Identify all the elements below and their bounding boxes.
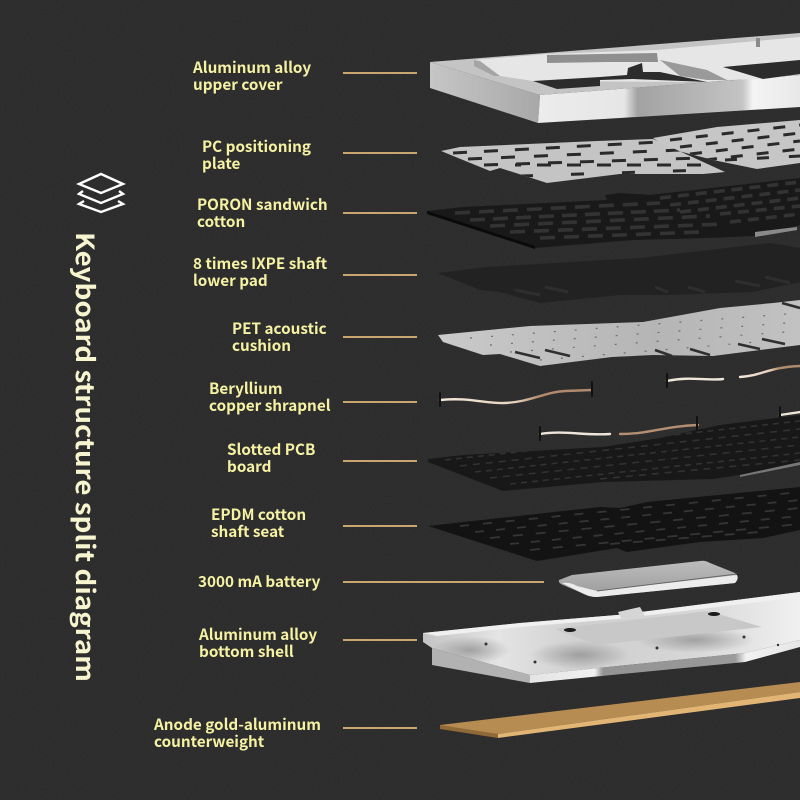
label: EPDM cotton shaft seat: shaft seat [211,520,285,542]
part: PET acoustic cushion [438,300,800,366]
label: PORON sandwich cotton [197,193,417,232]
label: 8 times IXPE shaft lower pad: lower pad [193,269,268,291]
label: 8 times IXPE shaft lower pad [193,252,417,291]
label: PET acoustic cushion: PET acoustic [232,317,327,339]
label: PC positioning plate: PC positioning [202,135,311,157]
label: PET acoustic cushion: cushion [232,334,291,356]
label: PORON sandwich cotton: PORON sandwich [197,193,328,215]
label: slotted PCB board: board [227,455,271,477]
part: anode gold-aluminum counterweight [440,682,800,738]
icon: stacked layers [79,174,123,212]
label: EPDM cotton shaft seat: EPDM cotton [211,503,306,525]
label: anode gold-aluminum counterweight: Anode gold-aluminum [153,713,321,735]
label: aluminum alloy bottom shell: bottom shell [199,640,294,662]
part: EPDM cotton shaft seat [428,487,800,561]
part: beryllium copper shrapnel [440,366,800,440]
part: bottom shell [423,592,800,683]
label: PORON sandwich cotton: cotton [197,210,245,232]
label: PET acoustic cushion [232,317,417,356]
label: beryllium copper shrapnel: Beryllium [209,377,283,399]
label: 8 times IXPE shaft lower pad: 8 times IXPE shaft [193,252,328,274]
part: upper cover [430,33,800,123]
label: beryllium copper shrapnel: copper shrapnel [209,394,331,416]
label: aluminum alloy bottom shell: Aluminum alloy [198,623,317,645]
part: PORON sandwich cotton [427,178,800,249]
title: vertical heading: Keyboard structure split diagram [68,232,104,682]
label: aluminum alloy upper cover [192,56,417,95]
label: 3000 mA battery: 3000 mA battery [198,570,321,592]
label: aluminum alloy upper cover: upper cover [193,73,283,95]
part: IXPE lower pad [438,243,800,303]
label: EPDM cotton shaft seat [211,503,417,542]
label: slotted PCB board: Slotted PCB [227,438,315,460]
label: aluminum alloy upper cover: Aluminum alloy [192,56,311,78]
label: anode gold-aluminum counterweight [153,713,417,752]
part: PC positioning plate [441,120,800,183]
label: anode gold-aluminum counterweight: counterweight [154,730,265,752]
part: battery [559,561,738,597]
part: slotted PCB board [428,415,800,491]
label: aluminum alloy bottom shell [198,623,417,662]
label: beryllium copper shrapnel [209,377,417,416]
label: PC positioning plate [202,135,417,174]
label: slotted PCB board [227,438,417,477]
label: PC positioning plate: plate [202,152,240,174]
